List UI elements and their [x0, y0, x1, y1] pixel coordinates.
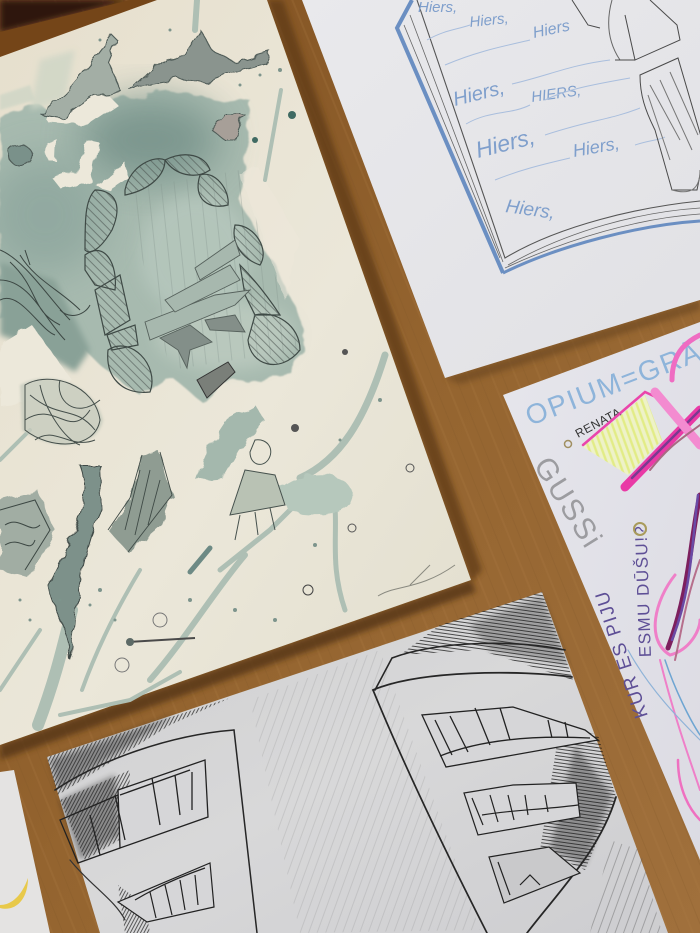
dark figure left cliff: [0, 490, 55, 578]
pencil structure lines: [55, 643, 616, 933]
window: upper right: [422, 707, 598, 767]
handwriting on book page: Hiers,: [571, 133, 621, 161]
pink crayon scribbles: [583, 335, 700, 820]
tangled creature lines: [0, 250, 90, 340]
open book sketch: [397, 0, 700, 273]
paper highlights in the wash: [0, 92, 300, 405]
handwriting on book page: Hiers,: [469, 10, 509, 31]
question text: KUR ES PIJU: [591, 587, 653, 721]
blue green splash near middle: [196, 405, 265, 480]
giraffe shaped wash: [278, 474, 352, 515]
window: lower right: [489, 847, 580, 903]
handwriting on book page: [418, 0, 621, 224]
question text: ESMU DŪŠU!?: [631, 524, 655, 658]
handwriting on book page: Hiers: [531, 18, 571, 42]
handwriting on book page: Hiers,: [451, 77, 507, 111]
dark hatching shade areas: [47, 592, 662, 933]
panel: pencil drawing of window buildings: [47, 592, 668, 933]
window: upper left: [60, 760, 208, 863]
window: lower left: [118, 863, 214, 922]
drips and lower washes: [0, 0, 385, 725]
panel: small white paper bottom left: [0, 770, 50, 933]
tree: [20, 378, 103, 660]
handwriting on book page: Hiers,: [473, 123, 537, 163]
label: Renata: RENATA: [573, 405, 623, 441]
panel: watercolour paper: [0, 0, 471, 745]
small circle mark: [564, 440, 572, 448]
yellow hatched box: [583, 395, 662, 475]
chain of hatched lobes: [85, 155, 300, 392]
dress figure: [108, 452, 172, 552]
label: Gussi: GUSSi: [527, 451, 609, 555]
yellow circle mark: [634, 523, 646, 535]
panel: pink crayon paper: [503, 322, 700, 860]
stacked hatched terraces: [145, 240, 250, 368]
handwriting on book page: HIERS,: [530, 82, 582, 106]
signature and small marks: [18, 28, 455, 672]
girl figure sketch: [572, 0, 700, 192]
green watercolour wash: [0, 50, 305, 405]
wavy ruled lines: [427, 25, 665, 180]
panel: book drawing paper: [302, 0, 700, 378]
yellow crayon mark: [0, 878, 28, 909]
book shape on paper: [197, 362, 235, 398]
handwriting on book page: Hiers,: [504, 196, 556, 224]
small figure: [230, 440, 285, 540]
window: middle right: [464, 783, 580, 835]
question text: [591, 524, 655, 721]
top dark ink shapes: [8, 30, 270, 165]
